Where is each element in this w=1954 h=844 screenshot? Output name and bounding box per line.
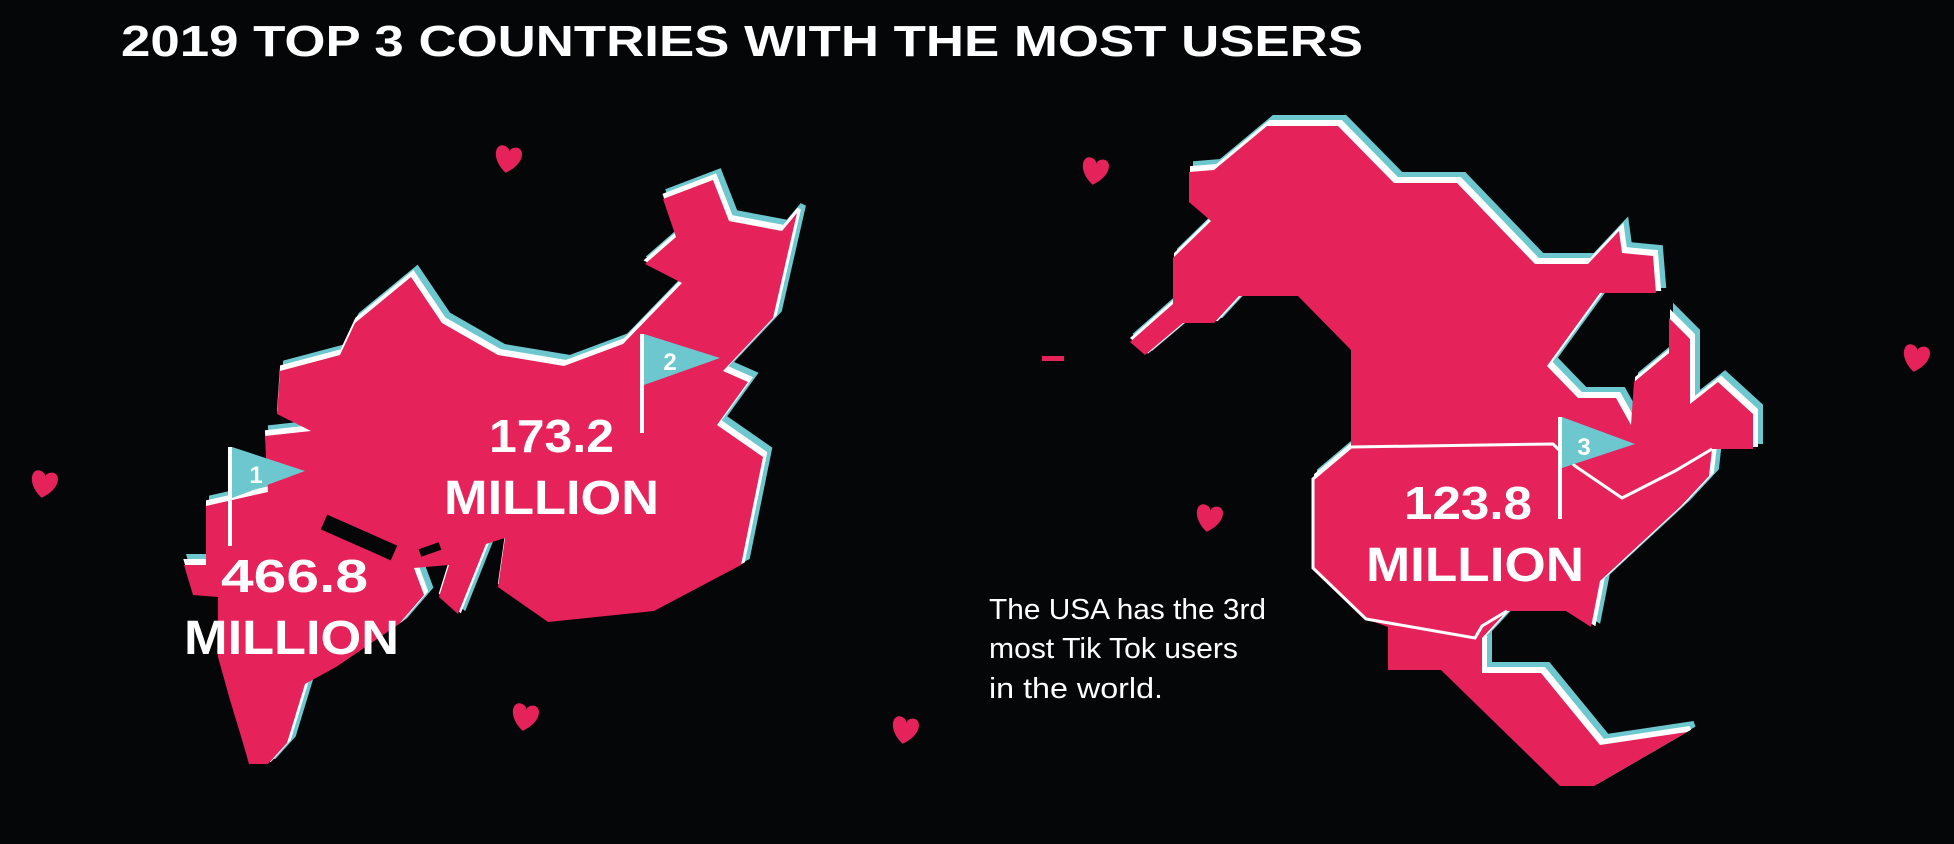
flag 3 bbox=[1560, 417, 1635, 519]
flag 3: 3 bbox=[1577, 434, 1591, 461]
flag 1 bbox=[230, 447, 305, 546]
flag 2 bbox=[642, 334, 720, 433]
caption text bbox=[989, 594, 1266, 705]
label: USA 123.8 million bbox=[1366, 477, 1584, 592]
label: USA 123.8 million: MILLION bbox=[1366, 539, 1584, 592]
flag 1: 1 bbox=[249, 462, 263, 489]
map: North America bbox=[1042, 118, 1760, 786]
label: China 173.2 million: MILLION bbox=[444, 472, 659, 525]
label: India 466.8 million: 466.8 bbox=[221, 550, 368, 602]
caption text: most Tik Tok users bbox=[989, 633, 1238, 665]
title: 2019 TOP 3 COUNTRIES WITH THE MOST USERS bbox=[121, 17, 1363, 66]
hearts bbox=[29, 144, 1931, 746]
label: China 173.2 million: 173.2 bbox=[489, 410, 614, 462]
caption text: in the world. bbox=[989, 673, 1163, 705]
flag 2: 2 bbox=[663, 349, 677, 376]
label: USA 123.8 million: 123.8 bbox=[1404, 477, 1532, 529]
label: India 466.8 million bbox=[184, 550, 399, 665]
caption text: The USA has the 3rd bbox=[989, 594, 1266, 626]
label: India 466.8 million: MILLION bbox=[184, 612, 399, 665]
map: China and India bbox=[184, 172, 803, 764]
label: China 173.2 million bbox=[444, 410, 659, 525]
